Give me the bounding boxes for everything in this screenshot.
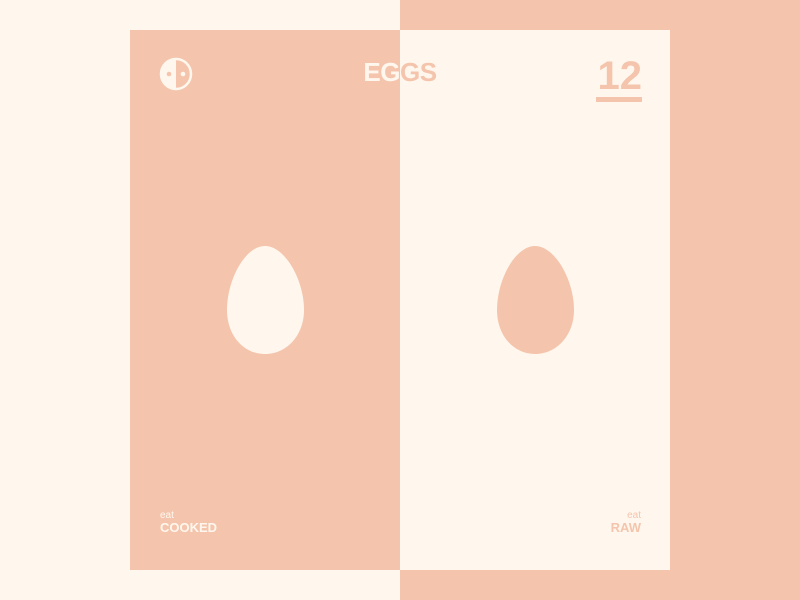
label: eat raw: RAW: [611, 520, 642, 535]
label: eat raw: [611, 510, 642, 535]
icon: half face: [160, 58, 191, 90]
label: eat raw: eat: [627, 510, 641, 521]
label: eat cooked: [160, 510, 217, 535]
title: EGGS: [363, 57, 437, 87]
title: [365, 62, 436, 82]
egg: cooked: [227, 246, 304, 354]
label: eat cooked: eat: [160, 510, 174, 521]
number 12: 12: [598, 54, 642, 98]
title: EGGS: [363, 57, 437, 87]
panel: raw: [400, 30, 670, 570]
egg: raw: [497, 246, 574, 354]
label: eat cooked: COOKED: [160, 520, 217, 535]
panel: cooked: [130, 30, 400, 570]
